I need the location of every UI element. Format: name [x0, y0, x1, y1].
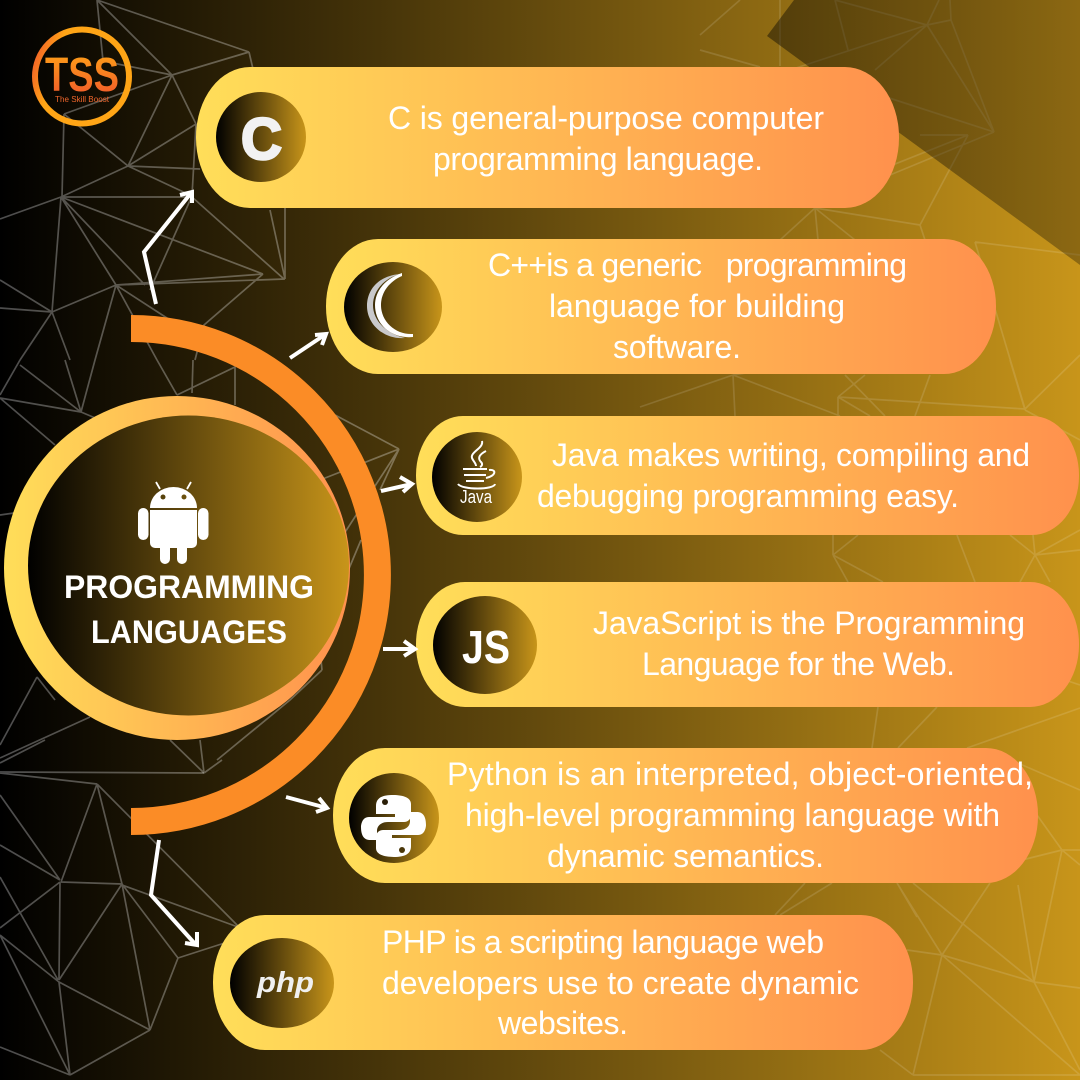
central circle [4, 396, 350, 740]
text: PHP [382, 924, 859, 1041]
text: Python [447, 756, 1033, 874]
panel: Python [333, 748, 1038, 883]
heading: LANGUAGES [91, 614, 287, 650]
text: JavaScript [593, 605, 1025, 682]
text: C++: software. [613, 329, 741, 365]
panel: JavaScript [416, 582, 1079, 707]
panel: PHP [213, 915, 913, 1050]
text: C++: C++is a generic programming [488, 247, 907, 283]
heading [64, 569, 314, 650]
arrow: to PHP [151, 840, 197, 945]
mesh pattern: left [0, 0, 399, 1075]
pill: C++ [326, 239, 996, 374]
panel: C [196, 67, 899, 208]
logo: The Skill Boost [35, 30, 129, 124]
text: C++ [488, 247, 907, 365]
text: JavaScript: JavaScript is the Programming [593, 605, 1025, 641]
text: Python: Python is an interpreted, object-oriented, [447, 756, 1033, 792]
text: Java: debugging programming easy. [537, 478, 959, 514]
pill: C [196, 67, 899, 208]
text: Python: high-level programming language with [465, 797, 1000, 833]
icon: JS: JS [462, 621, 510, 673]
icon: Java [432, 432, 522, 522]
text: C [388, 100, 824, 177]
arrow: to Python [286, 797, 327, 812]
text: JavaScript: Language for the Web. [642, 646, 955, 682]
pill: JavaScript [416, 582, 1079, 707]
arrow: to C++ [290, 334, 326, 358]
arc around central circle [131, 328, 377, 822]
text: PHP: PHP is a scripting language web [382, 924, 824, 960]
icon: C [216, 92, 306, 182]
text: Python: dynamic semantics. [547, 838, 824, 874]
logo: The Skill Boost: TSS [45, 49, 119, 102]
icon: PHP: php [256, 967, 314, 999]
circle core [28, 416, 349, 716]
text: C: programming language. [433, 141, 763, 177]
arrow: to C [144, 192, 192, 304]
pill: PHP [213, 915, 913, 1050]
panel: C++ [326, 239, 996, 374]
icon: C++ [344, 262, 442, 352]
pill: Python [333, 748, 1038, 883]
circle ring [4, 396, 350, 740]
text: Java: Java makes writing, compiling and [552, 437, 1030, 473]
mesh pattern: right [640, 0, 1080, 1075]
text: C++: language for building [549, 288, 845, 324]
icon: android [138, 482, 208, 564]
arrow: to JavaScript [383, 641, 415, 656]
logo: The Skill Boost: The Skill Boost [55, 95, 110, 104]
text: C: C is general-purpose computer [388, 100, 824, 136]
heading: PROGRAMMING [64, 569, 314, 605]
text: PHP: developers use to create dynamic [382, 965, 859, 1001]
icon: JS [433, 596, 537, 694]
arrow: to Java [381, 477, 412, 492]
dark corner shape [767, 0, 1080, 265]
text: PHP: websites. [497, 1005, 628, 1041]
panel: Java [416, 416, 1079, 535]
icon: Java: Java [460, 487, 493, 507]
icon: C: C [241, 107, 282, 172]
icon: PHP [230, 938, 334, 1028]
icon: Python [349, 773, 439, 863]
pill: Java [416, 416, 1079, 535]
text: Java [537, 437, 1030, 514]
